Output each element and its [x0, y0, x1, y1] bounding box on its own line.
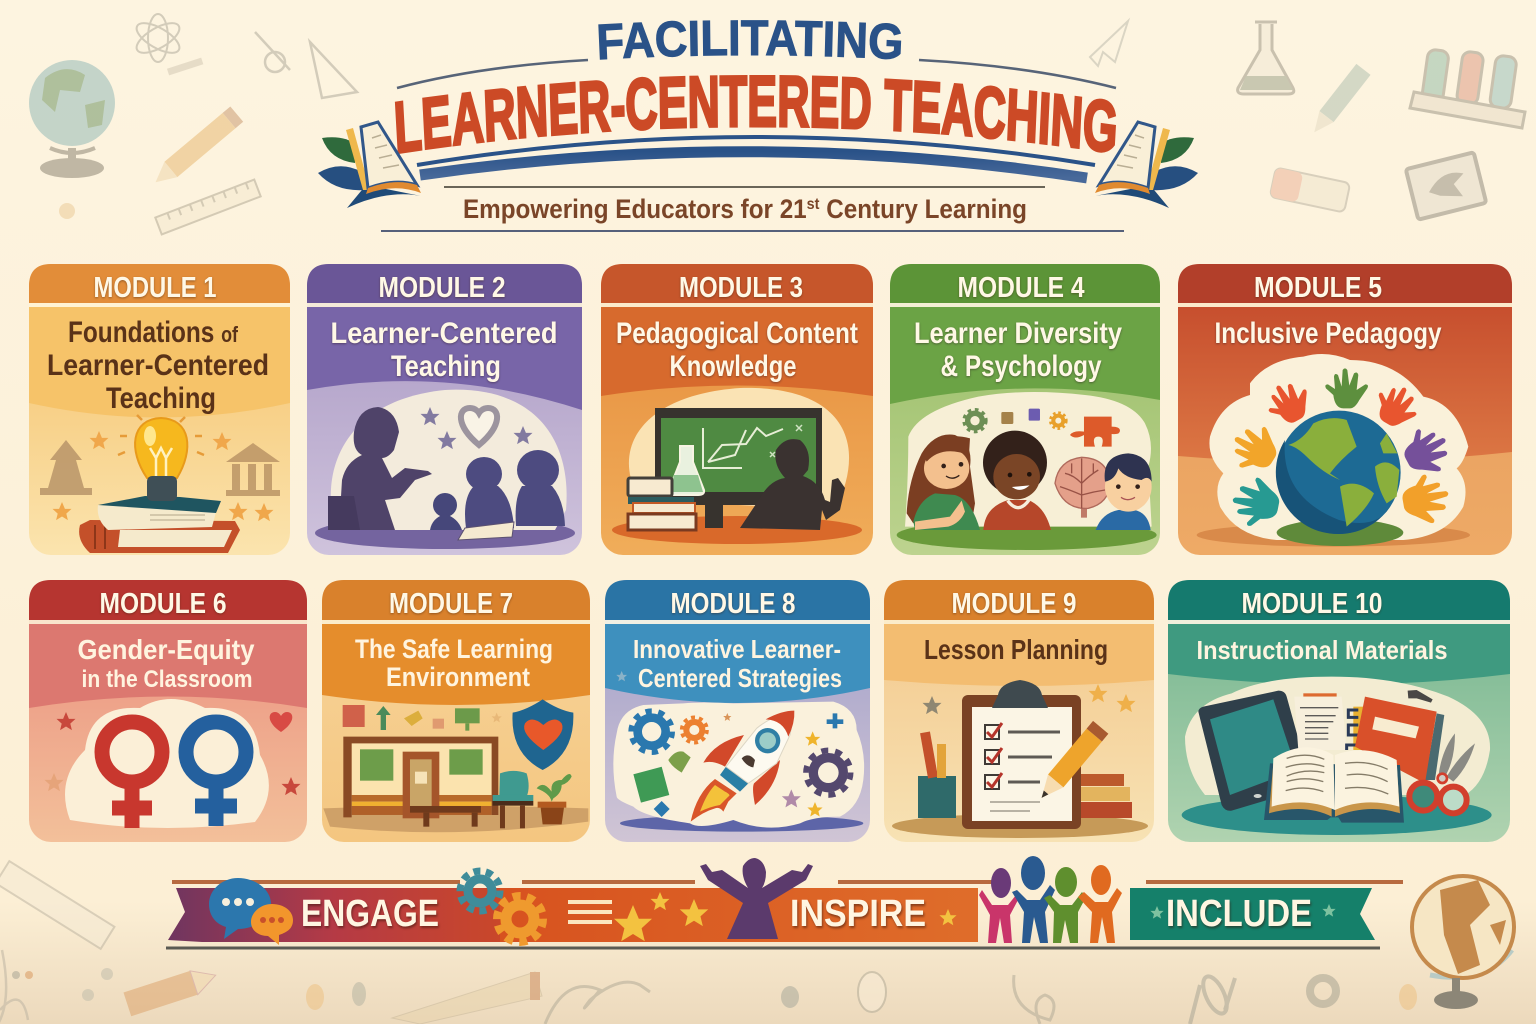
icon: books: [1080, 774, 1132, 818]
icon: stars: [922, 684, 1136, 714]
module title: The Safe Learning: [355, 634, 553, 664]
module title: in the Classroom: [82, 666, 252, 693]
classroom wall and board: [343, 737, 498, 818]
module title: [914, 317, 1122, 383]
module title: Teaching: [391, 350, 501, 383]
icons: gears and puzzle: [964, 409, 1120, 447]
ground: [620, 815, 863, 832]
icon: brain: [1055, 457, 1110, 518]
module title: Instructional Materials: [1196, 635, 1448, 665]
module title: Teaching: [106, 382, 216, 415]
icon: person arms raised: [700, 858, 813, 939]
module title: Learner Diversity: [914, 317, 1122, 350]
icon: tablet: [1198, 691, 1312, 811]
panel: module 7: [322, 580, 590, 842]
illustration: globe and hands: [1197, 354, 1470, 547]
cream cloud: [65, 699, 269, 828]
subtitle: Century Learning: [819, 194, 1027, 224]
illustration: classroom: [323, 699, 588, 832]
ground ellipse: [1277, 519, 1403, 546]
module label: MODULE 1: [94, 272, 216, 304]
icon: rocket: [691, 711, 794, 822]
module label: MODULE 4: [958, 272, 1084, 304]
cream cloud: [1209, 354, 1468, 540]
top stripes: [172, 880, 1403, 884]
title line: learner-centered teaching: LEARNER-CENTERED TEACHING: [394, 75, 1116, 154]
illustration: rocket and gears: [613, 671, 864, 832]
ground: [315, 517, 575, 549]
ground: [612, 516, 862, 544]
icon: gears: [631, 711, 851, 795]
ground: [892, 814, 1148, 838]
module title: [330, 317, 558, 383]
module title: & Psychology: [940, 350, 1102, 383]
icon: red folder with spiral: [1347, 690, 1444, 783]
module title: [355, 634, 553, 692]
illustration: materials: [1182, 677, 1492, 835]
icon: small shapes: [616, 671, 843, 817]
ground: [1182, 795, 1492, 835]
notebook: [458, 522, 514, 540]
module title: [47, 316, 269, 415]
icon: shield heart: [512, 699, 573, 770]
module title: Knowledge: [670, 350, 796, 383]
boy: [1096, 453, 1152, 530]
girl: [907, 435, 980, 530]
module label: MODULE 2: [378, 272, 506, 304]
panel: module 2: [307, 264, 582, 555]
module title: [616, 317, 858, 383]
cream thought cloud: [331, 390, 567, 530]
module title: Learner-Centered: [330, 317, 558, 350]
divider above subtitle: [444, 186, 1045, 188]
icon: small star: [939, 909, 957, 925]
icon: sparkles: [52, 431, 274, 521]
module label: MODULE 9: [952, 588, 1076, 620]
panel: module 8: [605, 580, 870, 842]
panel: module 3: [601, 264, 873, 555]
module label: MODULE 6: [100, 588, 226, 620]
icon: temple right: [226, 443, 280, 496]
icon: open book: [1264, 747, 1404, 823]
icon: open book left: [318, 122, 426, 208]
icon: flask: [669, 446, 704, 495]
decorative doodles: top right: [1238, 22, 1525, 220]
icon: pencil cup: [918, 731, 956, 818]
banner: [166, 856, 1403, 948]
icon: light bulb: [118, 415, 204, 501]
icon: female symbol red: [102, 722, 162, 828]
panel: module 6: [29, 580, 307, 842]
module label: MODULE 10: [1242, 588, 1382, 620]
teacher silhouette: [740, 439, 845, 530]
ground: [323, 806, 588, 832]
icon: pencil: [1034, 721, 1108, 804]
chair: [328, 496, 360, 530]
icon: book stack: [628, 478, 696, 530]
module title: Pedagogical Content: [616, 317, 858, 350]
ribbon: include: [1130, 888, 1375, 940]
icon: hands circle: [1224, 368, 1457, 531]
module title: Environment: [386, 662, 530, 692]
module label: MODULE 3: [679, 272, 803, 304]
panel: module 9: [884, 580, 1154, 842]
module title: Centered Strategies: [638, 663, 842, 693]
label: engage: ENGAGE: [301, 893, 439, 935]
module title: Gender-Equity: [78, 634, 255, 665]
panel: module 1: [29, 264, 290, 555]
decorative doodles: top left: [29, 14, 1128, 234]
icon: open book right: [1090, 122, 1198, 208]
ribbon under title: [417, 137, 1095, 178]
module title: Learner-Centered: [47, 349, 269, 382]
desk: [690, 498, 790, 528]
teacher silhouette: [339, 407, 432, 530]
module title: [633, 634, 842, 693]
ribbon: engage: [168, 888, 500, 942]
icon: gears: [460, 871, 543, 942]
module label: MODULE 5: [1254, 272, 1382, 304]
chair and table: [493, 771, 533, 828]
child centre: [983, 431, 1051, 530]
arc lines beside title: [397, 60, 1116, 88]
module title: [78, 634, 255, 693]
module title: Innovative Learner-: [633, 634, 841, 664]
cream cloud: [905, 392, 1152, 527]
icons: heart and stars: [44, 712, 300, 795]
cream cloud: [1185, 677, 1490, 795]
label: inspire: INSPIRE: [790, 893, 926, 935]
cream spot: [629, 388, 849, 510]
divider below subtitle: [381, 230, 1124, 232]
ground shadow: [1197, 523, 1470, 547]
globe: bottom right: [1412, 876, 1514, 1009]
icon: group of people: [979, 856, 1122, 943]
ground: [897, 520, 1157, 550]
ribbon: inspire: [500, 888, 978, 942]
title block: [318, 20, 1198, 232]
icon: speech bubbles: [209, 878, 293, 945]
icon: ribbon stars: [1150, 904, 1336, 919]
module label: MODULE 8: [670, 588, 796, 620]
student silhouettes: [430, 450, 565, 530]
icon: scissors: [1409, 733, 1475, 813]
icon: globe: [1276, 411, 1401, 534]
icon: lines and stars: [568, 892, 708, 941]
label: include: INCLUDE: [1166, 893, 1312, 935]
panel: module 5: [1178, 264, 1512, 555]
module title: Foundations of: [68, 316, 239, 349]
module label: MODULE 7: [389, 588, 513, 620]
icon: clipboard: [962, 680, 1081, 829]
cream cloud: [613, 702, 864, 828]
icon: stacked books: [79, 496, 240, 553]
module title: Inclusive Pedagogy: [1214, 317, 1442, 350]
icon: female symbol blue: [186, 722, 246, 826]
subtitle: st: [807, 196, 820, 213]
panel: module 10: [1168, 580, 1510, 842]
panel: module 4: [890, 264, 1160, 555]
decorative doodles: bottom: [0, 861, 1417, 1024]
bench: [410, 806, 481, 827]
icon: heart and stars: [420, 407, 532, 449]
baseline: [166, 946, 1380, 950]
icon: papers: [1294, 693, 1347, 750]
illustration: children and brain: [897, 392, 1157, 550]
icon: temple left: [40, 440, 92, 495]
title line: facilitating: FACILITATING: [598, 20, 902, 60]
blackboard: [655, 408, 822, 498]
module title: Lesson Planning: [924, 634, 1108, 665]
icon: plant: [537, 774, 572, 824]
classroom decorations: [343, 705, 502, 731]
subtitle: Empowering Educators for 21: [463, 194, 846, 224]
